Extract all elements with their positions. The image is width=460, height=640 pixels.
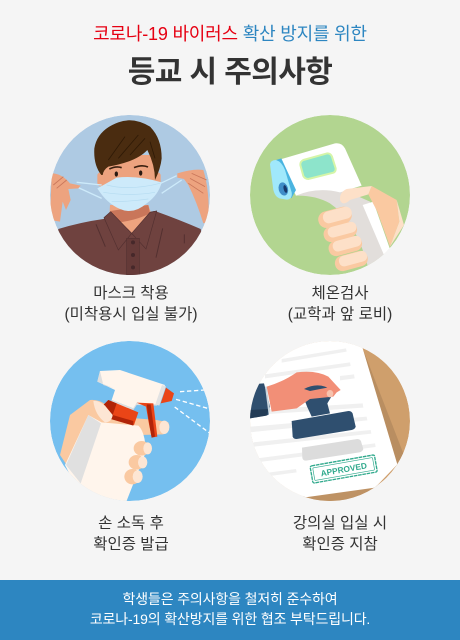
icon: person putting on mask <box>47 115 213 278</box>
subtitle: 코로나-19 바이러스 확산 방지를 위한 <box>93 24 367 44</box>
footer banner: 학생들은 주의사항을 철저히 준수하여 <box>123 591 337 607</box>
label: temperature check: 체온검사 <box>311 285 369 302</box>
icon: sanitizer spray bottle <box>50 341 210 508</box>
label: temperature check: (교학과 앞 로비) <box>288 306 392 323</box>
label: classroom entry: 강의실 입실 시 <box>293 515 387 532</box>
title: 등교 시 주의사항 <box>128 56 332 89</box>
label: classroom entry: 확인증 지참 <box>302 536 378 553</box>
label: mask: (미착용시 입실 불가) <box>64 306 198 323</box>
footer banner <box>0 580 460 640</box>
label: hand sanitizing <box>93 515 169 553</box>
icon: thermometer in hand <box>250 115 410 275</box>
icon: approval stamp on document <box>250 341 410 501</box>
label: temperature check <box>288 285 392 323</box>
label: hand sanitizing: 손 소독 후 <box>98 515 164 532</box>
label: classroom entry <box>293 515 387 553</box>
footer banner: 코로나-19의 확산방지를 위한 협조 부탁드립니다. <box>90 611 370 627</box>
label: hand sanitizing: 확인증 발급 <box>93 536 169 553</box>
illustrations <box>50 115 410 501</box>
label: mask <box>64 285 198 323</box>
icon: approval stamp on document: APPROVED <box>320 460 368 478</box>
label: mask: 마스크 착용 <box>93 285 169 302</box>
